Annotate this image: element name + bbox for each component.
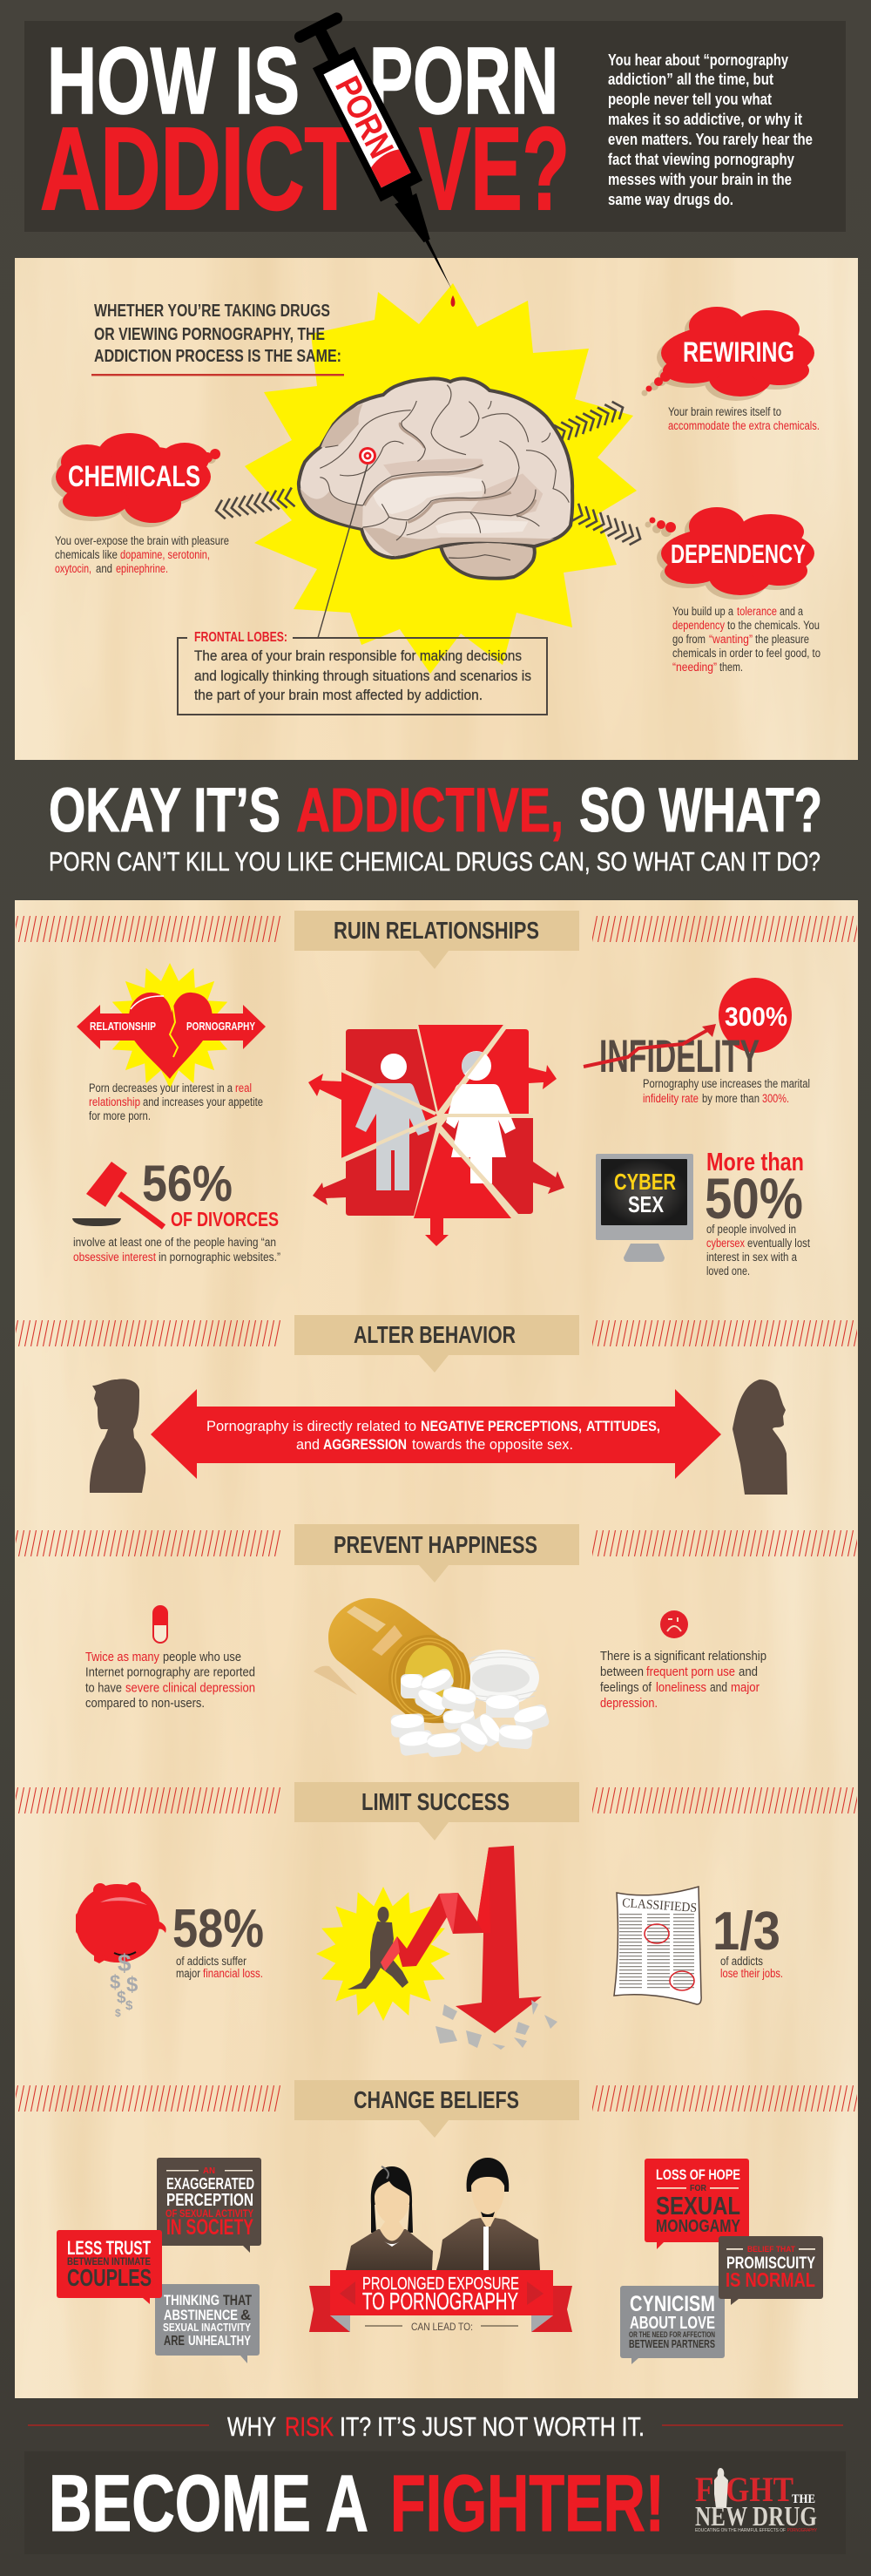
icon: man portrait bbox=[436, 2158, 540, 2270]
callout: frontal lobes bbox=[178, 630, 547, 715]
cloud: rewiring bbox=[646, 307, 814, 397]
intro text bbox=[608, 51, 813, 208]
title: ADDICT bbox=[40, 103, 355, 234]
arrow: pushes apart bbox=[151, 1389, 721, 1479]
heading: okay it's addictive bbox=[49, 776, 822, 845]
bubble: loss of hope: FOR bbox=[690, 2184, 707, 2193]
text: loneliness bbox=[600, 1650, 766, 1711]
bubble: exaggerated perception bbox=[157, 2158, 261, 2253]
intro text: fact that viewing pornography bbox=[608, 151, 794, 168]
panel: become a fighter bbox=[24, 2451, 846, 2554]
text: dependency: go from bbox=[672, 633, 706, 646]
stat: infidelity: 300%. bbox=[762, 1092, 789, 1105]
icon: piggy bank bbox=[76, 1882, 166, 2019]
yellow starburst bbox=[245, 283, 637, 674]
illustration: couple bbox=[309, 2158, 572, 2333]
bubble: exaggerated perception: IN SOCIETY bbox=[166, 2215, 253, 2240]
text: loneliness: loneliness bbox=[656, 1681, 706, 1695]
stat: 56% of divorces: involve at least one of the people having “an bbox=[73, 1236, 276, 1249]
bubble: cynicism bbox=[620, 2286, 725, 2364]
stat: more than 50%: interest in sex with a bbox=[706, 1251, 797, 1264]
text: dependency: them. bbox=[719, 661, 743, 674]
text: clinical depression: Twice as many bbox=[85, 1651, 160, 1664]
text: real relationship: relationship bbox=[89, 1095, 140, 1108]
arrow: pushes apart: AGGRESSION bbox=[323, 1436, 407, 1453]
title bbox=[40, 28, 570, 234]
bottle bbox=[328, 1598, 470, 1723]
arrow: pushes apart: towards the opposite sex. bbox=[412, 1436, 573, 1453]
closing line: IT? IT’S JUST NOT WORTH IT. bbox=[340, 2411, 645, 2442]
logo: fight the new drug: THE bbox=[792, 2492, 815, 2506]
bubble: thinking that: THINKING bbox=[164, 2292, 219, 2308]
section header: alter behavior: ALTER BEHAVIOR bbox=[354, 1321, 516, 1348]
stat: 58% of addicts bbox=[172, 1899, 264, 1980]
bubble: less trust: LESS TRUST bbox=[67, 2237, 151, 2259]
call to action: BECOME A bbox=[49, 2459, 368, 2548]
intro text: addiction” all the time, but bbox=[608, 71, 773, 88]
callout: frontal lobes: the part of your brain most affected by addiction. bbox=[194, 688, 483, 703]
ribbon bbox=[309, 2270, 572, 2332]
title: VE? bbox=[419, 103, 570, 234]
bubble: less trust bbox=[57, 2230, 162, 2304]
text: real relationship: real bbox=[235, 1081, 252, 1095]
intro text: people never tell you what bbox=[608, 91, 772, 108]
logo: fight the new drug: PORNOGRAPHY bbox=[787, 2528, 818, 2533]
bubble: promiscuity: IS NORMAL bbox=[726, 2268, 815, 2291]
text: dependency: dependency bbox=[672, 619, 725, 632]
bubble: thinking that: ARE bbox=[164, 2334, 185, 2349]
bubble: thinking that: & bbox=[240, 2307, 251, 2323]
icon: woman silhouette bbox=[733, 1380, 787, 1495]
text: dependency bbox=[672, 605, 820, 674]
icon: blood drop bbox=[451, 295, 455, 307]
bubble: exaggerated perception: OF SEXUAL ACTIVITY bbox=[165, 2207, 253, 2220]
text: rewiring: accommodate the extra chemicals. bbox=[668, 419, 820, 432]
stat: more than 50%: loved one. bbox=[706, 1264, 750, 1278]
icon: piggy bank: $ bbox=[118, 1949, 132, 1976]
section header: alter behavior bbox=[16, 1315, 857, 1373]
text: chemicals: and bbox=[96, 562, 112, 575]
arrow: pushes apart: NEGATIVE PERCEPTIONS, bbox=[421, 1418, 582, 1434]
section header: change beliefs bbox=[16, 2080, 857, 2138]
text: loneliness: feelings of bbox=[600, 1681, 652, 1695]
icon: broken heart with arrows: PORNOGRAPHY bbox=[186, 1020, 255, 1033]
callout: frontal lobes: and logically thinking through situations and scenarios is bbox=[194, 668, 531, 684]
text: rewiring bbox=[668, 405, 820, 432]
bubble: exaggerated perception: PERCEPTION bbox=[166, 2191, 253, 2210]
section header: change beliefs: CHANGE BELIEFS bbox=[354, 2086, 519, 2113]
stat: 58% of addicts: major bbox=[176, 1967, 200, 1980]
icon: computer monitor: SEX bbox=[628, 1191, 665, 1217]
stat: one third: 1/3 bbox=[712, 1901, 780, 1962]
heading: addiction process: ADDICTION PROCESS IS THE SAME: bbox=[94, 347, 341, 366]
stat: infidelity: INFIDELITY bbox=[599, 1031, 760, 1082]
text: real relationship bbox=[89, 1081, 263, 1122]
heading: addiction process: OR VIEWING PORNOGRAPHY, THE bbox=[94, 325, 325, 344]
stat: 56% of divorces: OF DIVORCES bbox=[171, 1208, 279, 1230]
closing line bbox=[28, 2411, 843, 2442]
stat: 56% of divorces: in pornographic websites.” bbox=[159, 1251, 280, 1264]
section header: limit success: LIMIT SUCCESS bbox=[361, 1788, 510, 1815]
stat: infidelity: Pornography use increases the marital bbox=[643, 1077, 810, 1090]
section header: prevent happiness bbox=[16, 1524, 857, 1583]
call to action bbox=[49, 2459, 665, 2548]
text: dependency: and a bbox=[780, 605, 803, 618]
stat: more than 50% bbox=[705, 1149, 810, 1278]
text: clinical depression: people who use bbox=[163, 1651, 241, 1664]
text: dependency: to the chemicals. You bbox=[727, 619, 820, 632]
text: chemicals: oxytocin, bbox=[55, 562, 91, 575]
stat: one third: lose their jobs. bbox=[720, 1967, 783, 1980]
panel: addiction process bbox=[15, 258, 858, 760]
text: chemicals: epinephrine. bbox=[116, 562, 168, 575]
pills bbox=[390, 1666, 550, 1758]
text: loneliness: There is a significant relationship bbox=[600, 1650, 766, 1664]
section header: limit success bbox=[16, 1782, 857, 1840]
bubble: cynicism: OR THE NEED FOR AFFECTION bbox=[629, 2330, 715, 2339]
text: loneliness: and bbox=[739, 1665, 758, 1679]
bubble: promiscuity: BELIEF THAT bbox=[747, 2245, 795, 2254]
stat: 58% of addicts: 58% bbox=[172, 1899, 264, 1959]
text: loneliness: between bbox=[600, 1665, 644, 1679]
bubble: thinking that: ABSTINENCE bbox=[164, 2307, 238, 2323]
text: clinical depression: compared to non-users. bbox=[85, 1697, 205, 1711]
text: clinical depression: severe clinical depression bbox=[125, 1682, 255, 1696]
bubble: thinking that: THAT bbox=[223, 2292, 252, 2308]
logo: fight the new drug: EDUCATING ON THE HARMFUL EFFECTS OF bbox=[695, 2528, 786, 2533]
panel: consequences bbox=[15, 900, 858, 2398]
stat: more than 50%: More than bbox=[706, 1149, 804, 1176]
text: clinical depression: to have bbox=[85, 1682, 122, 1696]
label: dependency: DEPENDENCY bbox=[671, 539, 806, 569]
icon: piggy bank: $ bbox=[110, 1971, 120, 1993]
bubble: less trust: COUPLES bbox=[67, 2264, 152, 2291]
stat: 56% of divorces bbox=[73, 1156, 280, 1264]
stat: infidelity: by more than bbox=[702, 1092, 760, 1105]
stat: 56% of divorces: 56% bbox=[142, 1156, 233, 1212]
intro text: messes with your brain in the bbox=[608, 171, 792, 188]
icon: sad face bbox=[660, 1610, 688, 1638]
text: dependency: “needing” bbox=[672, 661, 717, 674]
call to action: FIGHTER! bbox=[390, 2459, 665, 2548]
callout: frontal lobes: The area of your brain responsible for making decisions bbox=[194, 648, 522, 664]
stat: more than 50%: eventually lost bbox=[747, 1237, 810, 1250]
text: clinical depression: Internet pornography are reported bbox=[85, 1666, 255, 1680]
chevrons: to rewiring bbox=[554, 398, 626, 443]
logo: fight the new drug: NEW DRUG bbox=[695, 2500, 817, 2532]
chevrons: to dependency bbox=[571, 504, 644, 548]
stat: 56% of divorces: obsessive interest bbox=[73, 1251, 156, 1264]
bubble: loss of hope: MONOGAMY bbox=[656, 2217, 741, 2236]
icon: classifieds newspaper: CLASSIFIEDS bbox=[622, 1896, 698, 1915]
arrow: pushes apart: Pornography is directly related to bbox=[206, 1418, 416, 1434]
illustration: falling success chart bbox=[316, 1846, 557, 2050]
text: clinical depression bbox=[85, 1651, 255, 1711]
stat: 58% of addicts: of addicts suffer bbox=[176, 1955, 246, 1968]
bubble: exaggerated perception: EXAGGERATED bbox=[166, 2175, 254, 2193]
icon: piggy bank: $ bbox=[126, 1973, 138, 1996]
bubble: cynicism: CYNICISM bbox=[630, 2292, 715, 2316]
icon: piggy bank: $ bbox=[115, 2007, 121, 2019]
title: PORN bbox=[369, 28, 558, 134]
icon: broken heart with arrows: RELATIONSHIP bbox=[90, 1020, 156, 1033]
icon: woman bbox=[446, 1051, 516, 1183]
intro text: same way drugs do. bbox=[608, 191, 733, 208]
icon: gavel bbox=[72, 1162, 164, 1227]
cloud: chemicals bbox=[56, 433, 220, 523]
heading: okay it's addictive: OKAY IT’S bbox=[49, 776, 280, 845]
intro text: You hear about “pornography bbox=[608, 51, 788, 69]
bubble: cynicism: BETWEEN PARTNERS bbox=[629, 2338, 715, 2350]
arrow: pushes apart: and bbox=[296, 1436, 320, 1453]
bubble: thinking that: SEXUAL INACTIVITY bbox=[163, 2321, 251, 2334]
icon: brain bbox=[299, 378, 572, 579]
text: loneliness: major bbox=[731, 1681, 760, 1695]
text: dependency: “wanting” bbox=[709, 633, 753, 646]
bubble: exaggerated perception: AN bbox=[203, 2166, 215, 2176]
illustration: broken couple bbox=[308, 1025, 564, 1246]
text: chemicals: dopamine, serotonin, bbox=[120, 548, 210, 561]
text: dependency: chemicals in order to feel good, to bbox=[672, 647, 820, 660]
leader line to frontal lobes bbox=[318, 464, 368, 638]
text: chemicals: You over-expose the brain with pleasure bbox=[55, 534, 229, 547]
stat: infidelity: 300% bbox=[725, 1001, 787, 1032]
bubble: thinking that bbox=[155, 2284, 260, 2363]
closing line: WHY bbox=[227, 2411, 276, 2442]
stat: one third: of addicts bbox=[720, 1955, 763, 1968]
heading: addiction process: WHETHER YOU’RE TAKING DRUGS bbox=[94, 302, 330, 321]
text: chemicals bbox=[55, 534, 229, 575]
icon: man bbox=[355, 1054, 429, 1190]
text: loneliness: depression. bbox=[600, 1697, 658, 1711]
icon: capsule bbox=[153, 1606, 167, 1643]
intro text: even matters. You rarely hear the bbox=[608, 131, 813, 148]
icon: broken heart with arrows bbox=[77, 963, 266, 1088]
text: loneliness: frequent porn use bbox=[646, 1665, 735, 1679]
stat: infidelity: infidelity rate bbox=[643, 1092, 699, 1105]
text: rewiring: Your brain rewires itself to bbox=[668, 405, 781, 418]
stat: 58% of addicts: financial loss. bbox=[203, 1967, 263, 1980]
title: HOW IS bbox=[47, 28, 300, 134]
label: syringe: PORN bbox=[327, 71, 401, 164]
icon: syringe bbox=[293, 10, 475, 301]
bubble: promiscuity: PROMISCUITY bbox=[726, 2254, 815, 2273]
icon: classifieds newspaper bbox=[614, 1887, 701, 2004]
logo: fight the new drug bbox=[695, 2468, 818, 2533]
bubble: loss of hope bbox=[645, 2159, 749, 2249]
bubble: less trust: BETWEEN INTIMATE bbox=[67, 2255, 151, 2268]
icon: frontal lobe target bbox=[359, 447, 376, 464]
panel: title banner bbox=[24, 21, 846, 234]
text: real relationship: Porn decreases your interest in a bbox=[89, 1081, 233, 1095]
section header: ruin relationships bbox=[16, 911, 857, 969]
stat: more than 50%: cybersex bbox=[706, 1237, 745, 1250]
stat: more than 50%: 50% bbox=[705, 1166, 803, 1230]
bubble: promiscuity bbox=[719, 2236, 823, 2305]
intro text: makes it so addictive, or why it bbox=[608, 111, 802, 128]
ribbon: PROLONGED EXPOSURE bbox=[362, 2274, 519, 2294]
text: dependency: the pleasure bbox=[755, 633, 809, 646]
icon: computer monitor: CYBER bbox=[614, 1169, 676, 1195]
text: chemicals: chemicals like bbox=[55, 548, 118, 561]
icon: piggy bank: $ bbox=[125, 1998, 133, 2013]
icon: woman portrait bbox=[346, 2166, 433, 2270]
bubble: cynicism: ABOUT LOVE bbox=[630, 2314, 715, 2333]
text: loneliness: and bbox=[710, 1681, 727, 1695]
cloud: dependency bbox=[650, 507, 814, 595]
stat: more than 50%: of people involved in bbox=[706, 1223, 796, 1236]
chevrons: to chemicals bbox=[214, 488, 295, 520]
heading: addiction process bbox=[91, 302, 344, 376]
icon: man silhouette bbox=[90, 1379, 145, 1493]
section header: prevent happiness: PREVENT HAPPINESS bbox=[334, 1531, 537, 1558]
illustration: spilled pill bottle bbox=[314, 1598, 550, 1758]
icon: computer monitor bbox=[596, 1154, 693, 1262]
text: real relationship: for more porn. bbox=[89, 1109, 151, 1122]
label: chemicals: CHEMICALS bbox=[68, 460, 200, 493]
text: real relationship: and increases your appetite bbox=[143, 1095, 263, 1108]
text: dependency: tolerance bbox=[737, 605, 777, 618]
bubble: thinking that: UNHEALTHY bbox=[188, 2334, 251, 2349]
section header: ruin relationships: RUIN RELATIONSHIPS bbox=[334, 917, 539, 944]
callout: frontal lobes: FRONTAL LOBES: bbox=[194, 630, 287, 645]
bottle cap bbox=[466, 1650, 539, 1705]
stat: infidelity bbox=[584, 978, 810, 1105]
arrow: pushes apart: ATTITUDES, bbox=[586, 1418, 660, 1434]
logo: fight the new drug: FIGHT bbox=[695, 2470, 793, 2509]
ribbon: TO PORNOGRAPHY bbox=[362, 2288, 518, 2315]
text: dependency: You build up a bbox=[672, 605, 733, 618]
closing line: RISK bbox=[285, 2411, 334, 2442]
heading: okay it's addictive: ADDICTIVE, bbox=[296, 776, 564, 845]
label: can lead to: CAN LEAD TO: bbox=[411, 2321, 473, 2333]
icon: piggy bank: $ bbox=[117, 1989, 126, 2007]
label: rewiring: REWIRING bbox=[683, 336, 794, 368]
bubble: loss of hope: SEXUAL bbox=[656, 2193, 740, 2220]
bubble: loss of hope: LOSS OF HOPE bbox=[656, 2166, 740, 2183]
